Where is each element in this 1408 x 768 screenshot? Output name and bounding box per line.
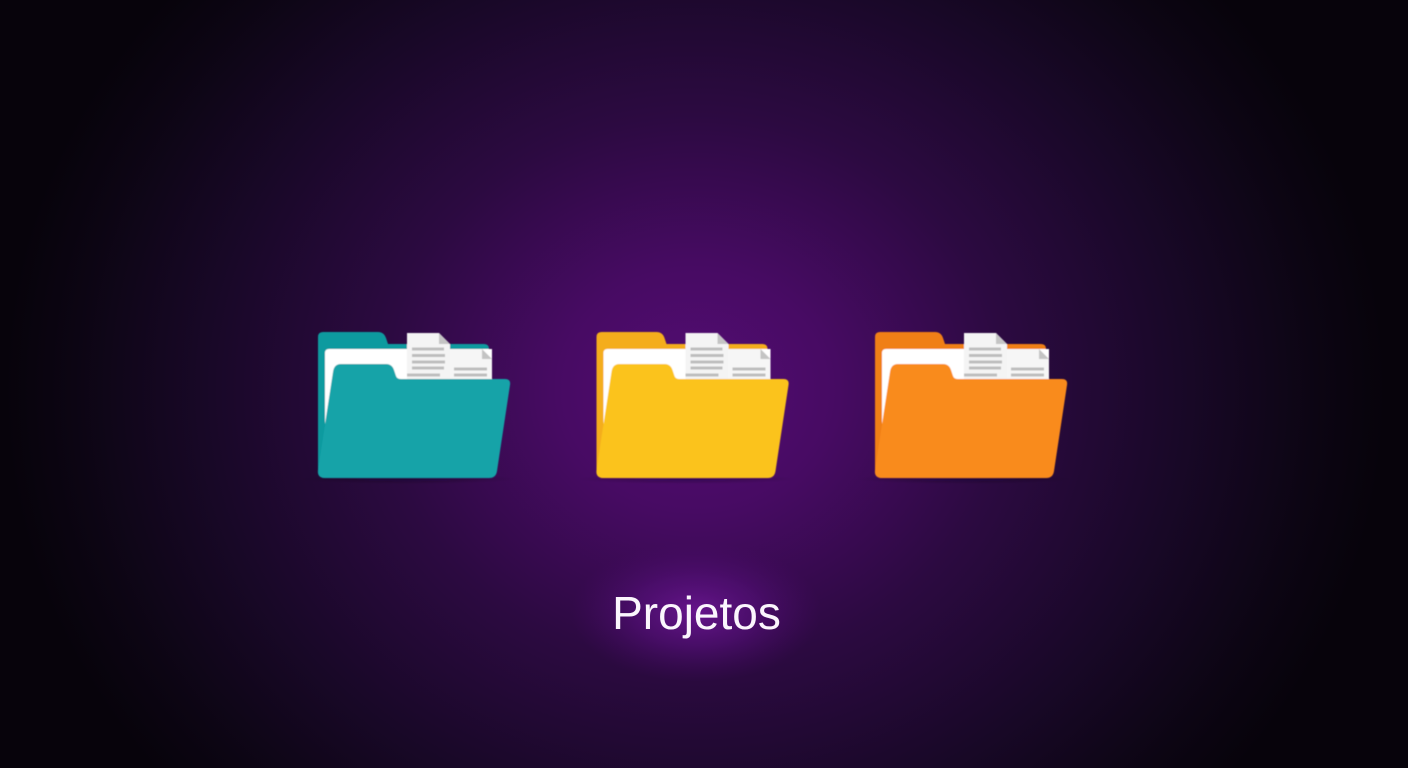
label: Projetos: Projetos — [612, 587, 781, 639]
icon: orange folder — [855, 332, 1075, 486]
icon: teal folder — [298, 332, 518, 486]
text glow — [540, 530, 852, 700]
icon: yellow folder — [576, 332, 796, 486]
